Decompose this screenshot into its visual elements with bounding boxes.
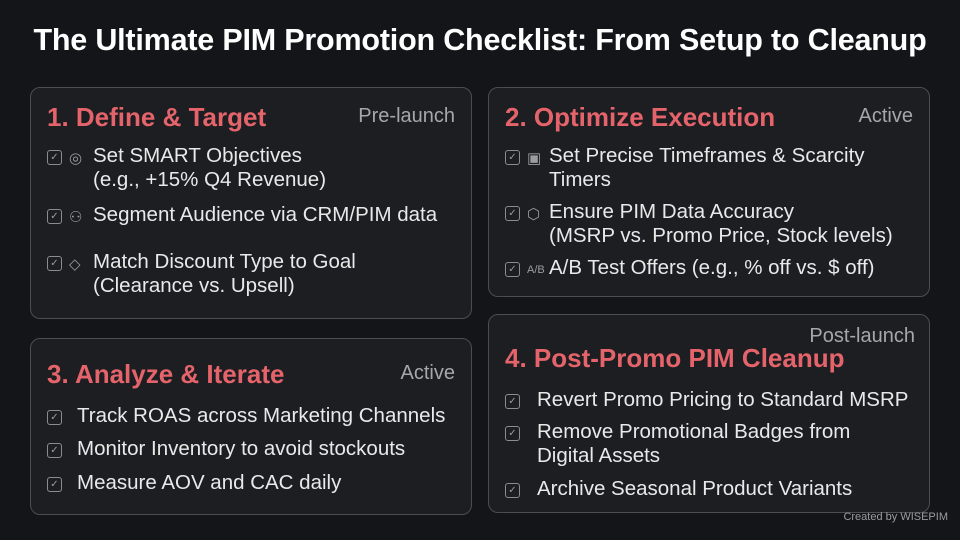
panel: post-promo cleanup: Archive Seasonal Product Variants	[537, 477, 852, 500]
panel: define & target: ◇	[69, 256, 81, 273]
item 3	[47, 250, 356, 297]
footer credit: Created by WISEPIM	[843, 511, 948, 523]
panel: post-promo cleanup: Remove Promotional Badges from	[537, 420, 850, 443]
panel: optimize execution: A/B	[527, 264, 545, 276]
panel: post-promo cleanup: Digital Assets	[537, 444, 660, 467]
panel: analyze & iterate	[30, 338, 472, 515]
heading: 2. Optimize Execution	[505, 102, 775, 132]
title: The Ultimate PIM Promotion Checklist: From Setup to Cleanup	[33, 23, 927, 57]
panel: post-promo cleanup: Revert Promo Pricing to Standard MSRP	[537, 388, 908, 411]
panel: analyze & iterate: ✓	[50, 412, 59, 423]
item 2	[47, 203, 438, 226]
panel: optimize execution: ✓	[508, 152, 517, 163]
panel: define & target: (Clearance vs. Upsell)	[93, 274, 295, 297]
item 2	[505, 420, 850, 467]
panel: analyze & iterate: Monitor Inventory to avoid stockouts	[77, 437, 405, 460]
item 2	[47, 437, 405, 460]
panel: post-promo cleanup: ✓	[508, 396, 517, 407]
panel: optimize execution: (MSRP vs. Promo Price, Stock levels)	[549, 224, 893, 247]
panel: optimize execution: Timers	[549, 168, 611, 191]
heading: 4. Post-Promo PIM Cleanup	[505, 343, 844, 373]
panel: optimize execution: ✓	[508, 208, 517, 219]
panel: post-promo cleanup: ✓	[508, 428, 517, 439]
item 1	[47, 144, 326, 191]
panel: post-promo cleanup: ✓	[508, 485, 517, 496]
panel: post-promo cleanup	[488, 314, 930, 513]
panel: define & target: ✓	[50, 258, 59, 269]
tag: Pre-launch	[358, 105, 455, 127]
item 1	[47, 404, 445, 427]
panel: optimize execution: Set Precise Timeframes & Scarcity	[549, 144, 865, 167]
item 3	[505, 256, 874, 279]
panel: define & target: ✓	[50, 152, 59, 163]
item 2	[505, 200, 893, 247]
panel: define & target: (e.g., +15% Q4 Revenue)	[93, 168, 326, 191]
item 3	[47, 471, 342, 494]
panel: analyze & iterate: ✓	[50, 445, 59, 456]
panel: optimize execution: Ensure PIM Data Accuracy	[549, 200, 794, 223]
panel: define & target: ✓	[50, 211, 59, 222]
tag: Active	[859, 105, 913, 127]
panel: optimize execution: ✓	[508, 264, 517, 275]
panel: analyze & iterate: ✓	[50, 479, 59, 490]
heading: 1. Define & Target	[47, 102, 266, 132]
panel: analyze & iterate: Measure AOV and CAC daily	[77, 471, 341, 494]
panel: optimize execution: ⬡	[527, 206, 540, 223]
panel: define & target: Segment Audience via CRM/PIM data	[93, 203, 437, 226]
panel: define & target: Set SMART Objectives	[93, 144, 302, 167]
panel: optimize execution	[488, 87, 930, 297]
panel: define & target: ⚇	[69, 209, 82, 226]
item 3	[505, 477, 852, 500]
panel: optimize execution: ▣	[527, 150, 541, 167]
item 1	[505, 388, 908, 411]
item 1	[505, 144, 865, 191]
tag: Post-launch	[809, 325, 915, 347]
panel: optimize execution: A/B Test Offers (e.g., % off vs. $ off)	[549, 256, 874, 279]
panel: define & target	[30, 87, 472, 319]
panel: define & target: ◎	[69, 150, 82, 167]
heading: 3. Analyze & Iterate	[47, 359, 284, 389]
panel: analyze & iterate: Track ROAS across Marketing Channels	[77, 404, 445, 427]
tag: Active	[401, 362, 455, 384]
panel: define & target: Match Discount Type to Goal	[93, 250, 356, 273]
